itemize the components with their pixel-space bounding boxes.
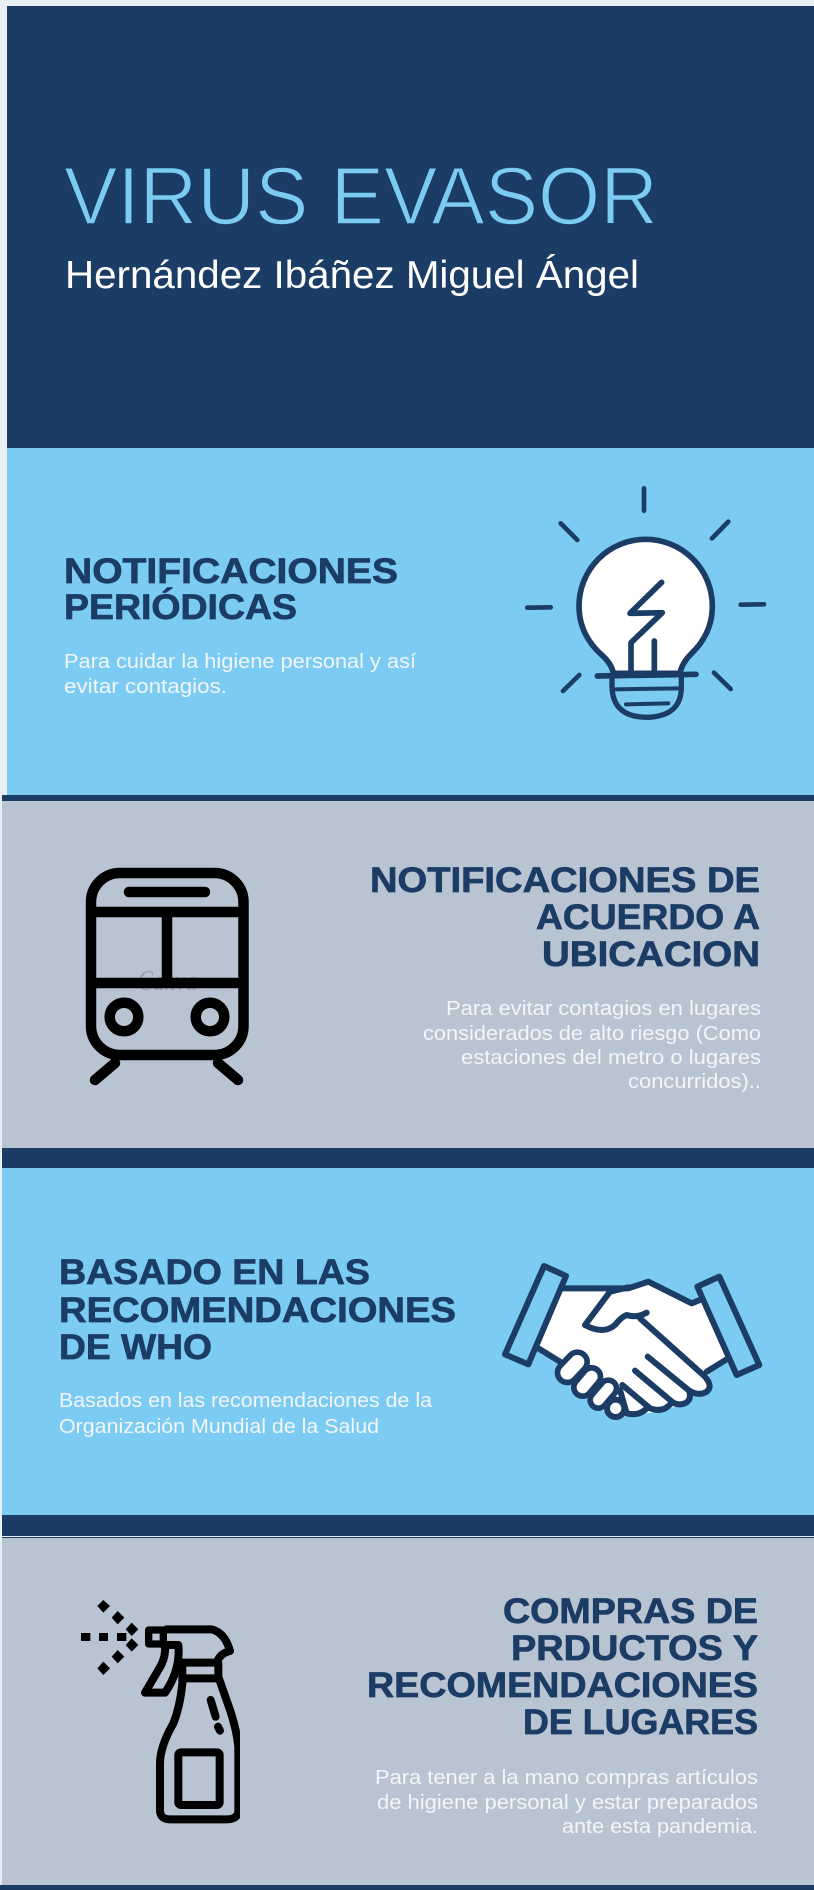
- text: panel 1 body: evitar contagios.: [64, 676, 227, 698]
- heading: notificaciones periódicas: PERIÓDICAS: [64, 587, 297, 627]
- text: panel 4 body: Para tener a la mano compras artículos: [375, 1767, 758, 1789]
- panel: notificaciones periódicas: [2, 448, 814, 801]
- text: panel 3 body: Basados en las recomendaciones de la: [59, 1390, 433, 1412]
- heading: notificaciones periódicas: NOTIFICACIONES: [64, 552, 398, 591]
- icon: train: Canva: [138, 966, 197, 997]
- heading: notificaciones de acuerdo a ubicacion: UBICACION: [542, 935, 760, 974]
- heading: basado en las recomendaciones de who: DE WHO: [59, 1328, 212, 1367]
- text: panel 2 body: [423, 998, 761, 1093]
- text: panel 4 body: de higiene personal y estar preparados: [377, 1792, 758, 1814]
- panel: basado en las recomendaciones de who: [2, 1168, 814, 1538]
- heading: notificaciones de acuerdo a ubicacion: NOTIFICACIONES DE: [370, 861, 760, 900]
- text: panel 2 body: considerados de alto riesgo (Como: [423, 1023, 761, 1045]
- text: panel 4 body: ante esta pandemia.: [562, 1816, 758, 1838]
- heading: compras de prductos y recomendaciones de lugares: PRDUCTOS Y: [511, 1629, 758, 1668]
- panel: compras de productos: [0, 1538, 814, 1890]
- icon: spray bottle: [81, 1600, 240, 1824]
- text: panel 2 body: Para evitar contagios en lugares: [446, 998, 761, 1020]
- text: panel 2 body: estaciones del metro o lugares: [461, 1047, 761, 1069]
- text: panel 4 body: [375, 1767, 758, 1838]
- heading: compras de prductos y recomendaciones de lugares: RECOMENDACIONES: [367, 1666, 758, 1705]
- text: panel 1 body: [64, 651, 416, 698]
- icon: handshake: [502, 1263, 762, 1420]
- icon: light bulb: [525, 486, 766, 720]
- icon: train: [91, 873, 244, 1080]
- heading: compras de prductos y recomendaciones de lugares: COMPRAS DE: [503, 1592, 758, 1631]
- text: panel 3 body: Organización Mundial de la Salud: [59, 1416, 379, 1438]
- heading: basado en las recomendaciones de who: BASADO EN LAS: [59, 1253, 370, 1292]
- heading: basado en las recomendaciones de who: RECOMENDACIONES: [59, 1291, 456, 1330]
- heading: notificaciones de acuerdo a ubicacion: ACUERDO A: [536, 898, 760, 937]
- heading: notificaciones periódicas: [64, 552, 398, 627]
- heading: notificaciones de acuerdo a ubicacion: [370, 861, 760, 974]
- subtitle: author: Hernández Ibáñez Miguel Ángel: [65, 254, 639, 297]
- panel: notificaciones de acuerdo a ubicacion: [2, 801, 814, 1168]
- heading: compras de prductos y recomendaciones de lugares: [367, 1592, 758, 1742]
- heading: basado en las recomendaciones de who: [59, 1253, 456, 1367]
- text: panel 2 body: concurridos)..: [628, 1071, 761, 1093]
- title: VIRUS EVASOR: [64, 151, 658, 242]
- panel: header: [7, 6, 814, 448]
- text: panel 3 body: [59, 1390, 433, 1438]
- heading: compras de prductos y recomendaciones de lugares: DE LUGARES: [523, 1703, 758, 1742]
- text: panel 1 body: Para cuidar la higiene personal y así: [64, 651, 416, 673]
